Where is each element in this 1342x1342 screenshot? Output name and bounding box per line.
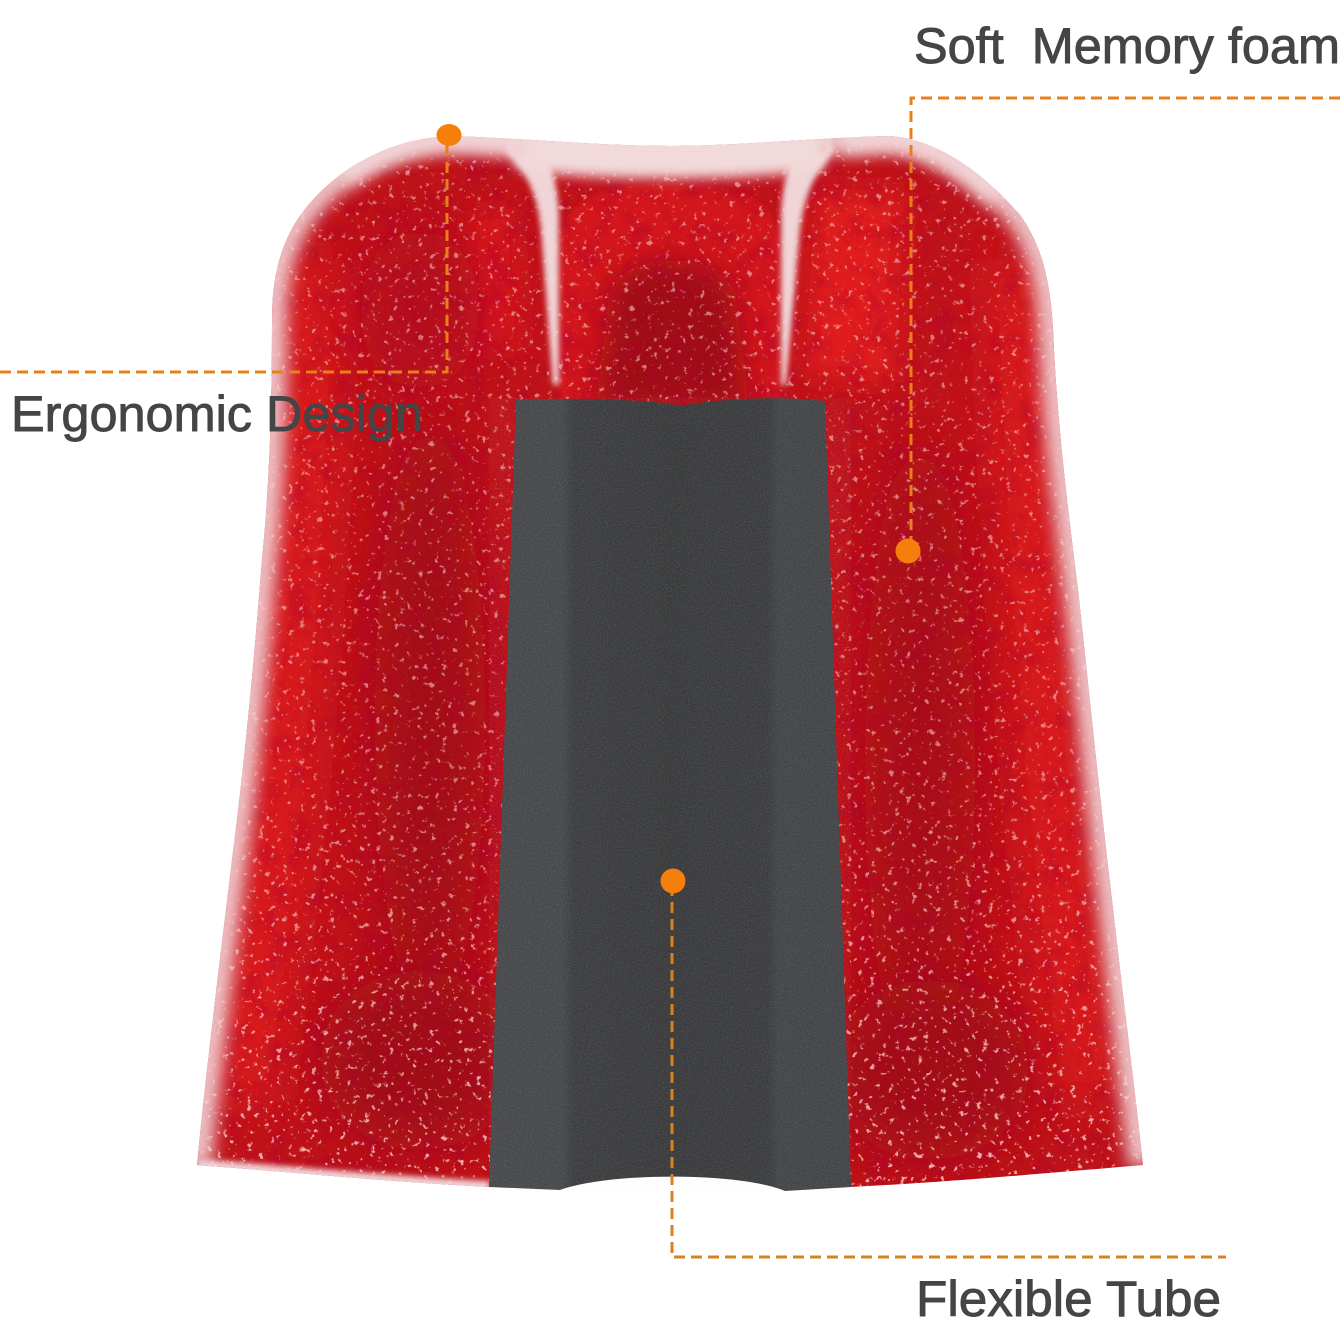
bright and dark regions xyxy=(245,260,310,1100)
flexible tube xyxy=(489,398,851,1191)
callout: soft memory foam leader xyxy=(896,98,1340,564)
channel highlights and top band xyxy=(505,130,835,385)
soft pale rim xyxy=(197,136,1143,1165)
heading: flexible tube: Flexible Tube xyxy=(916,1271,1221,1327)
centre channel xyxy=(560,186,780,400)
callout: ergonomic design leader xyxy=(0,124,462,372)
heading: soft memory foam: Soft Memory foam xyxy=(914,18,1340,74)
foam ear tip xyxy=(180,120,1160,1200)
heading: ergonomic design: Ergonomic Design xyxy=(11,386,423,442)
callout: flexible tube leader xyxy=(660,868,1226,1257)
